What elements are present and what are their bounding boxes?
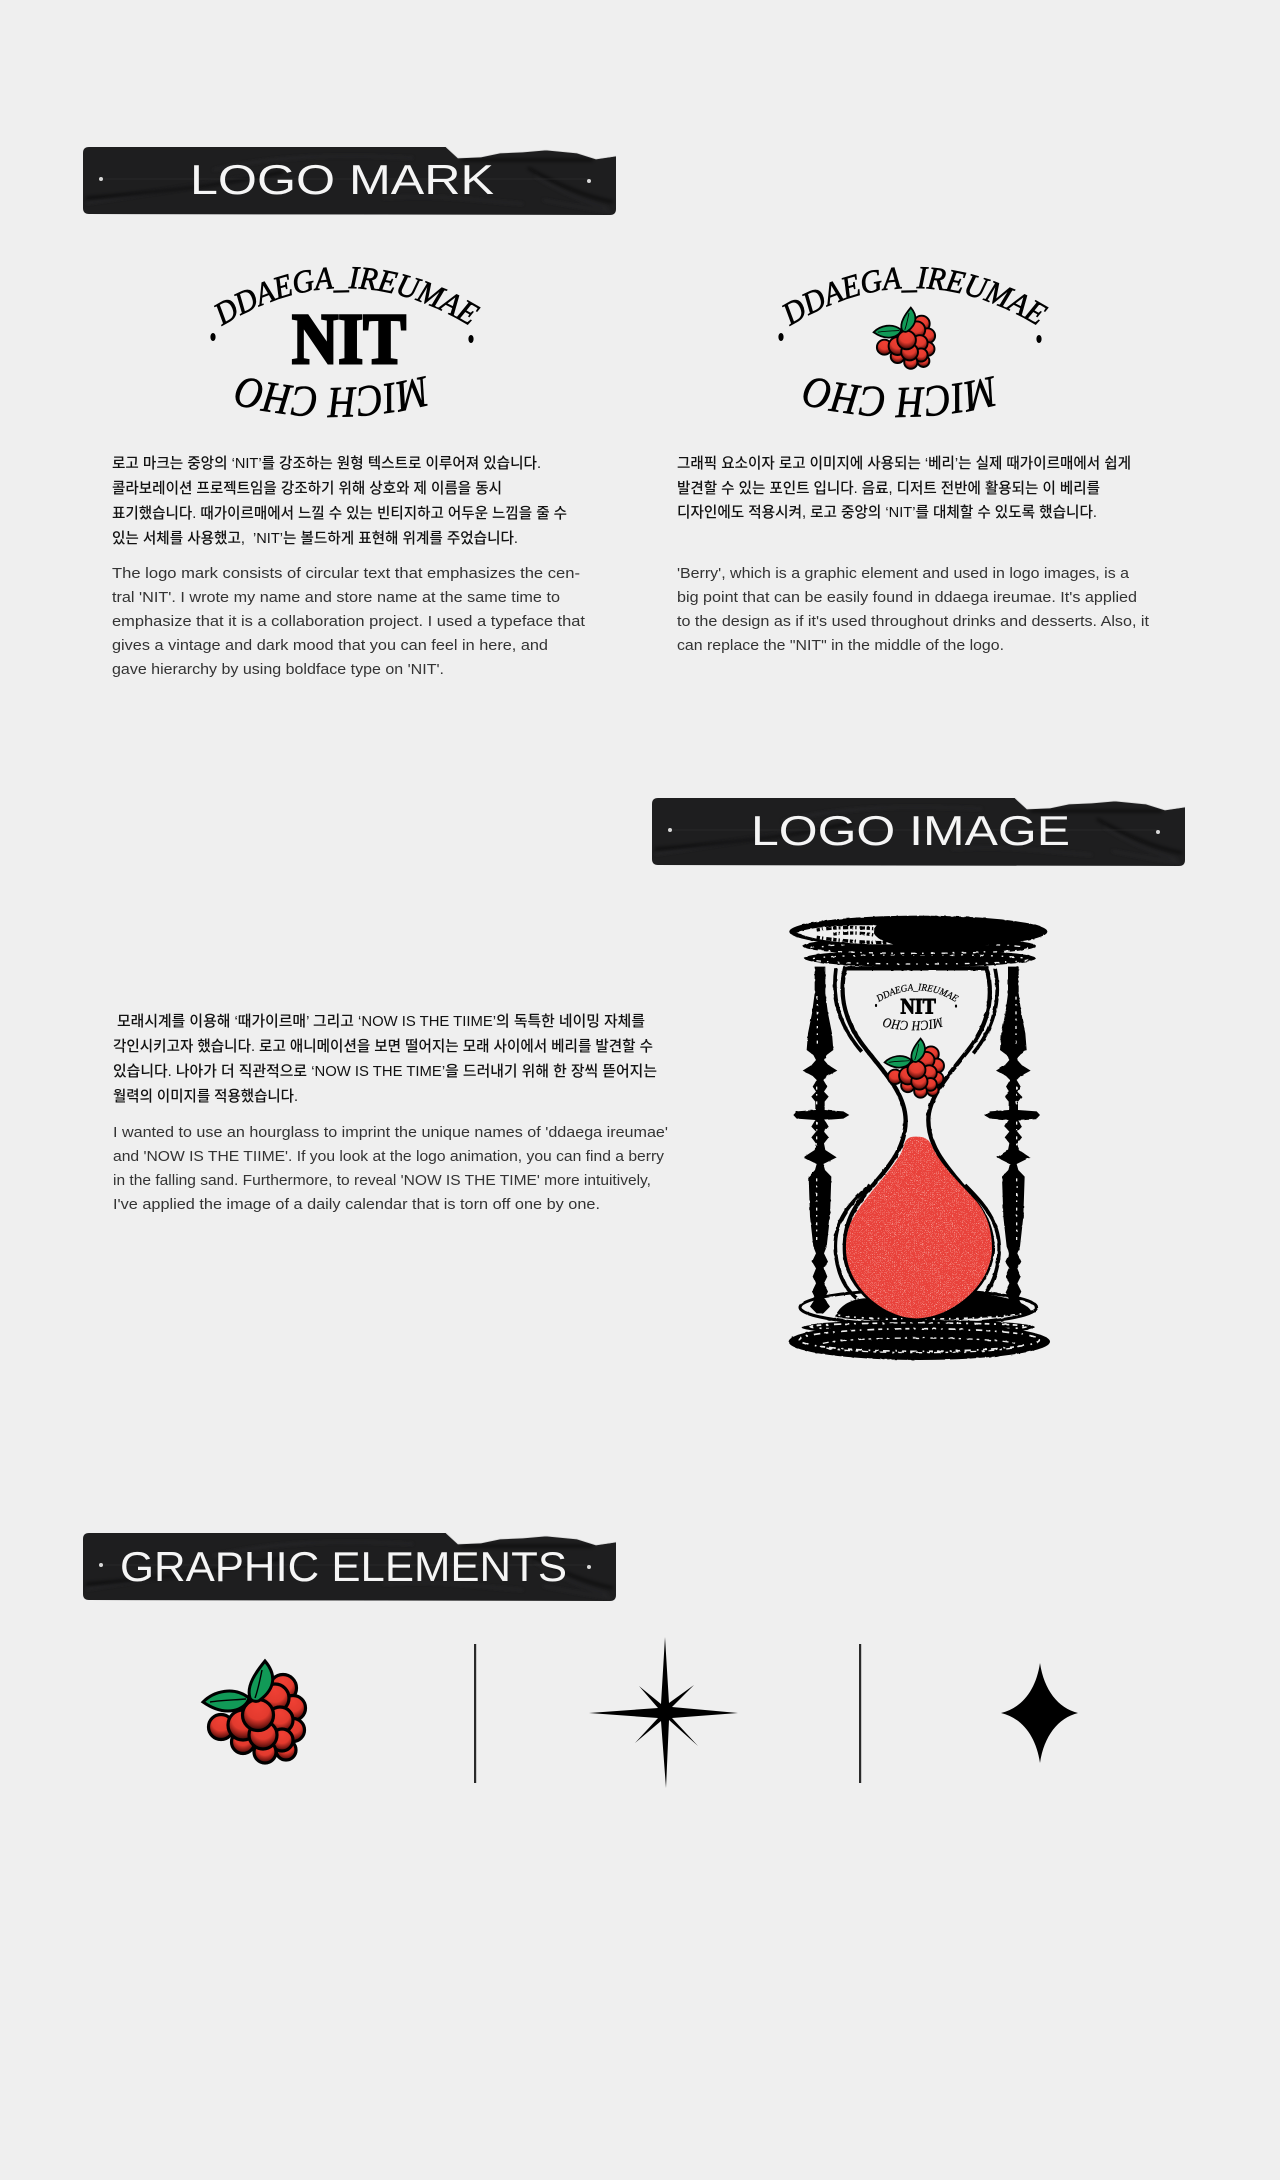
divider left <box>474 1644 476 1783</box>
text block: logo mark description: 콜라보레이션 프로젝트임을 강조하기 위해 상호와 제 이름을 동시 <box>112 480 502 497</box>
icon: eight-point star <box>589 1637 738 1788</box>
text block: hourglass description: I wanted to use an hourglass to imprint the unique names of 'ddaega ireumae' <box>113 1125 668 1141</box>
icon: four-point sparkle <box>1001 1663 1078 1763</box>
text block: berry description: big point that can be easily found in ddaega ireumae. It's applied <box>677 590 1137 606</box>
text block: berry description: 발견할 수 있는 포인트 입니다. 음료, 디저트 전반에 활용되는 이 베리를 <box>677 480 1100 497</box>
logo mark with berry <box>778 266 1049 418</box>
text block: logo mark description: The logo mark consists of circular text that emphasizes the cen- <box>112 566 580 582</box>
small logo inside hourglass: DDAEGA_IREUMAE <box>876 984 959 1002</box>
text block: berry description: 그래픽 요소이자 로고 이미지에 사용되는 ‘베리’는 실제 때가이르매에서 쉽게 <box>677 455 1131 472</box>
text block: berry description: can replace the "NIT" in the middle of the logo. <box>677 638 1004 654</box>
banner: logo image <box>652 797 1185 866</box>
text block: hourglass description <box>113 1013 668 1213</box>
small logo inside hourglass: NIT <box>901 994 936 1019</box>
logo mark with NIT: MICH CHO <box>235 376 428 418</box>
text block: hourglass description: 각인시키고자 했습니다. 로고 애니메이션을 보면 떨어지는 모래 사이에서 베리를 발견할 수 <box>113 1038 653 1055</box>
banner: graphic elements <box>83 1532 616 1601</box>
text block: logo mark description: tral 'NIT'. I wrote my name and store name at the same time to <box>112 590 560 606</box>
text block: berry description: to the design as if it's used throughout drinks and desserts. Also, it <box>677 614 1149 630</box>
text block: berry description: 디자인에도 적용시켜, 로고 중앙의 ‘NIT’를 대체할 수 있도록 했습니다. <box>677 504 1097 521</box>
logo mark with berry: MICH CHO <box>803 376 996 418</box>
illustration: hourglass <box>788 916 1050 1360</box>
text block: logo mark description: 표기했습니다. 때가이르매에서 느낄 수 있는 빈티지하고 어두운 느낌을 줄 수 <box>112 505 567 522</box>
page canvas <box>83 147 1185 1788</box>
text block: hourglass description: I've applied the image of a daily calendar that is torn off one by one. <box>113 1197 600 1213</box>
text block: berry description <box>677 455 1149 654</box>
text block: berry description: 'Berry', which is a graphic element and used in logo images, is a <box>677 566 1130 582</box>
text block: hourglass description: and 'NOW IS THE TIIME'. If you look at the logo animation, you can find a berry <box>113 1149 665 1165</box>
text block: hourglass description: 모래시계를 이용해 ‘때가이르매’ 그리고 ‘NOW IS THE TIIME’의 독특한 네이밍 자체를 <box>117 1013 645 1030</box>
text block: logo mark description: emphasize that it is a collaboration project. I used a typeface that <box>112 614 585 630</box>
text block: hourglass description: in the falling sand. Furthermore, to reveal 'NOW IS THE TIME' more intuitively, <box>113 1173 651 1189</box>
red sand <box>846 1137 992 1318</box>
text block: logo mark description: gave hierarchy by using boldface type on 'NIT'. <box>112 662 444 678</box>
banner: logo mark <box>83 146 616 215</box>
heading: graphic elements: GRAPHIC ELEMENTS <box>120 1543 567 1590</box>
heading: logo image: LOGO IMAGE <box>751 807 1070 854</box>
small logo inside hourglass: MICH CHO <box>883 1018 942 1030</box>
small logo inside hourglass <box>874 984 959 1030</box>
icon: berry in hourglass <box>885 1039 944 1098</box>
logo mark with NIT <box>210 266 481 418</box>
logo mark with berry: DDAEGA_IREUMAE <box>782 266 1049 326</box>
text block: logo mark description: gives a vintage and dark mood that you can feel in here, and <box>112 638 548 654</box>
text block: logo mark description <box>112 455 585 678</box>
logo mark with NIT: DDAEGA_IREUMAE <box>214 266 481 326</box>
divider right <box>859 1644 861 1783</box>
heading: logo mark: LOGO MARK <box>190 156 494 203</box>
text block: hourglass description: 월력의 이미지를 적용했습니다. <box>113 1088 298 1105</box>
text block: hourglass description: 있습니다. 나아가 더 직관적으로 ‘NOW IS THE TIME’을 드러내기 위해 한 장씩 뜯어지는 <box>113 1063 657 1080</box>
icon: berry element <box>203 1661 306 1763</box>
logo mark with NIT: NIT <box>292 299 406 379</box>
icon: berry in logo <box>874 308 935 369</box>
text block: logo mark description: 로고 마크는 중앙의 ‘NIT’를 강조하는 원형 텍스트로 이루어져 있습니다. <box>112 455 541 472</box>
text block: logo mark description: 있는 서체를 사용했고, ’NIT’는 볼드하게 표현해 위계를 주었습니다. <box>112 530 518 547</box>
